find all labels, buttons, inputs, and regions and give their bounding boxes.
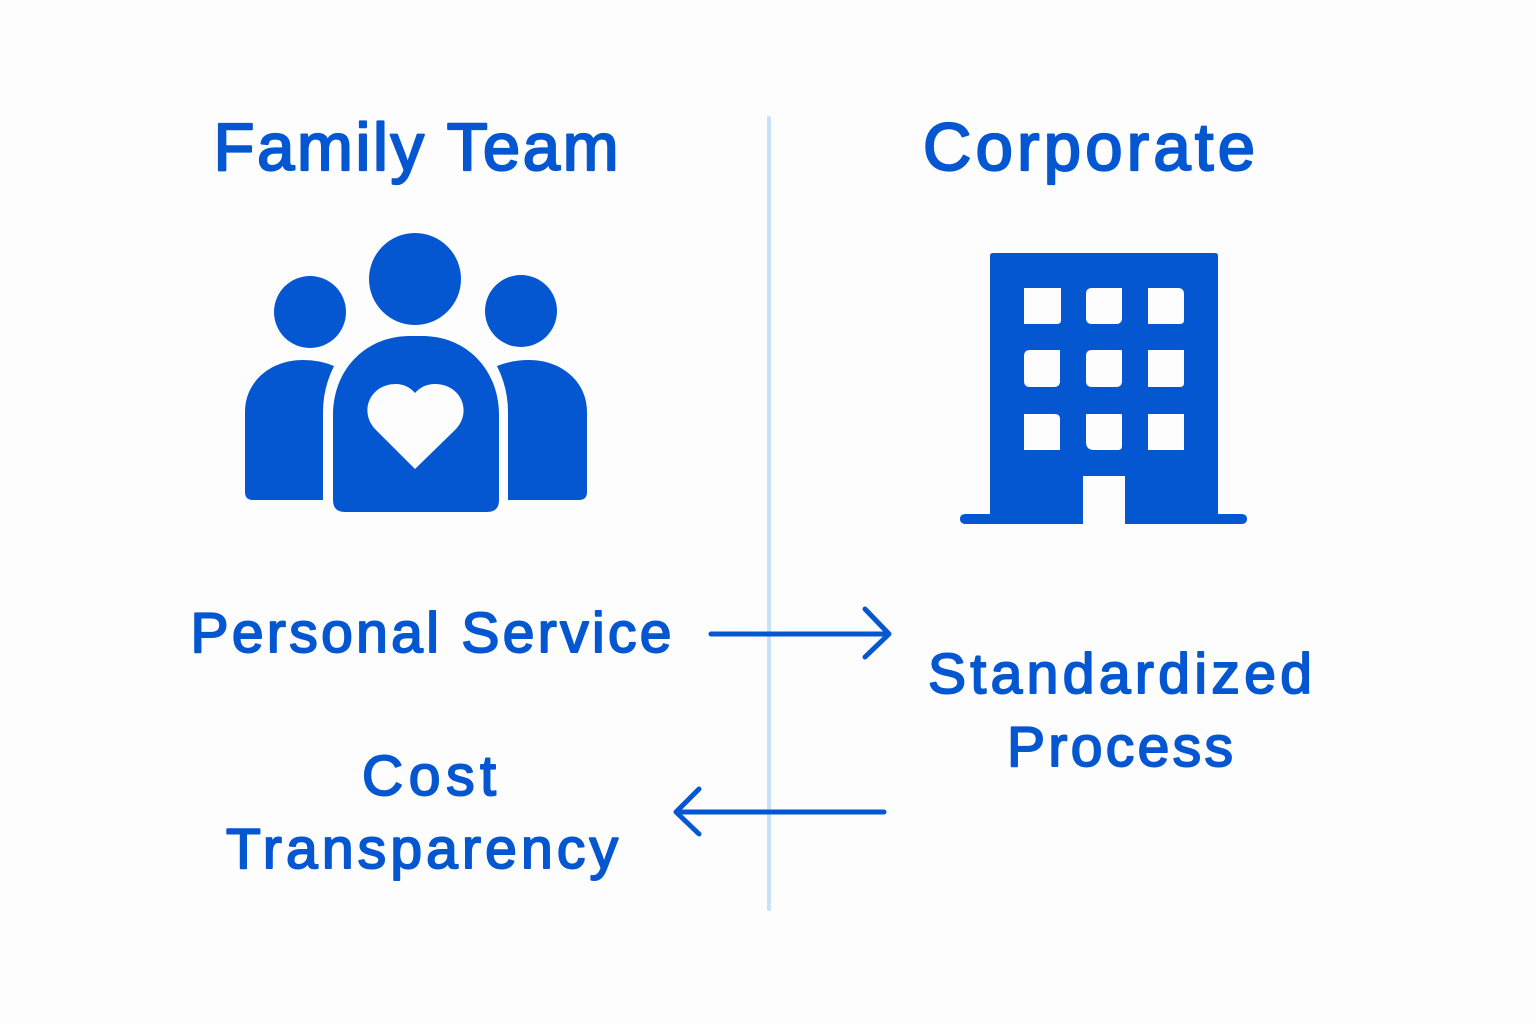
label: Cost Transparency	[226, 744, 618, 881]
label: Standardized Process: Process	[1007, 715, 1233, 779]
label: Personal Service: Personal Service	[190, 601, 672, 665]
label: Standardized Process	[928, 642, 1312, 779]
heading: Family Team: Family Team	[214, 110, 618, 185]
icon: family team	[245, 233, 587, 512]
heading: Corporate: Corporate	[923, 110, 1255, 185]
label: Standardized Process: Standardized	[928, 642, 1312, 706]
label: Cost Transparency: Transparency	[226, 817, 618, 881]
icon: office building	[960, 253, 1247, 524]
arrow: right	[711, 609, 889, 657]
label: Cost Transparency: Cost	[362, 744, 496, 808]
arrow: left	[676, 789, 884, 834]
